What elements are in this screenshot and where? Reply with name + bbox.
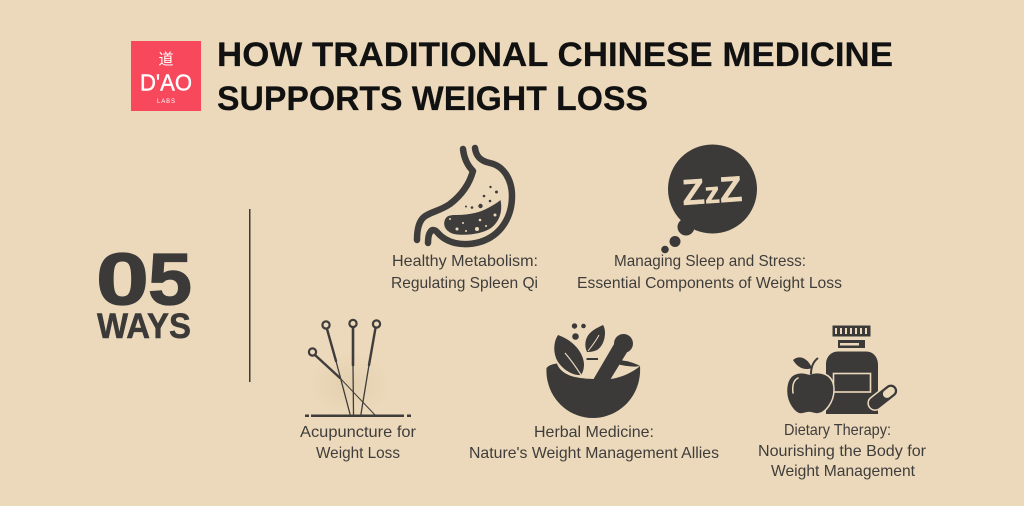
logo: D'AO Labs: 道 [158,51,174,68]
label: herbal medicine: Herbal Medicine: [534,424,654,441]
label: managing sleep and stress: Essential Components of Weight Loss [577,275,842,292]
icon: mortar and pestle with herbs [546,323,640,418]
label: acupuncture: Acupuncture for [300,424,417,441]
label: dietary therapy: Nourishing the Body for [758,443,927,460]
label: herbal medicine [469,424,719,462]
label: managing sleep and stress: Managing Sleep and Stress: [614,253,806,270]
heading: 05 ways [96,240,192,346]
label: healthy metabolism: Healthy Metabolism: [392,253,538,270]
label: acupuncture [300,424,417,462]
logo: D'AO Labs: LABS [157,99,175,105]
label: dietary therapy [758,422,927,480]
label: dietary therapy: Weight Management [771,463,916,480]
icon: apple, supplement bottle and capsule [786,326,901,414]
heading: 05 ways: 0 [96,240,149,320]
label: healthy metabolism: Regulating Spleen Qi [391,275,538,292]
title: HOW TRADITIONAL CHINESE MEDICINE [217,36,893,74]
icon: acupuncture needles [305,320,411,417]
vertical divider [249,209,250,382]
label: herbal medicine: Nature's Weight Management Allies [469,445,719,462]
label: dietary therapy: Dietary Therapy: [784,422,891,439]
heading: 05 ways: 5 [148,240,192,320]
logo: D'AO Labs [131,41,201,111]
title [217,36,893,118]
logo: D'AO Labs: D'AO [140,70,192,96]
icon: sleep thought bubble [661,144,757,253]
label: healthy metabolism [391,253,538,292]
heading: 05 ways: WAYS [97,307,191,346]
icon: stomach [417,148,512,244]
label: acupuncture: Weight Loss [316,445,400,462]
icon: sleep thought bubble: ZzZ [681,168,743,213]
title: SUPPORTS WEIGHT LOSS [217,80,648,118]
label: managing sleep and stress [577,253,842,292]
